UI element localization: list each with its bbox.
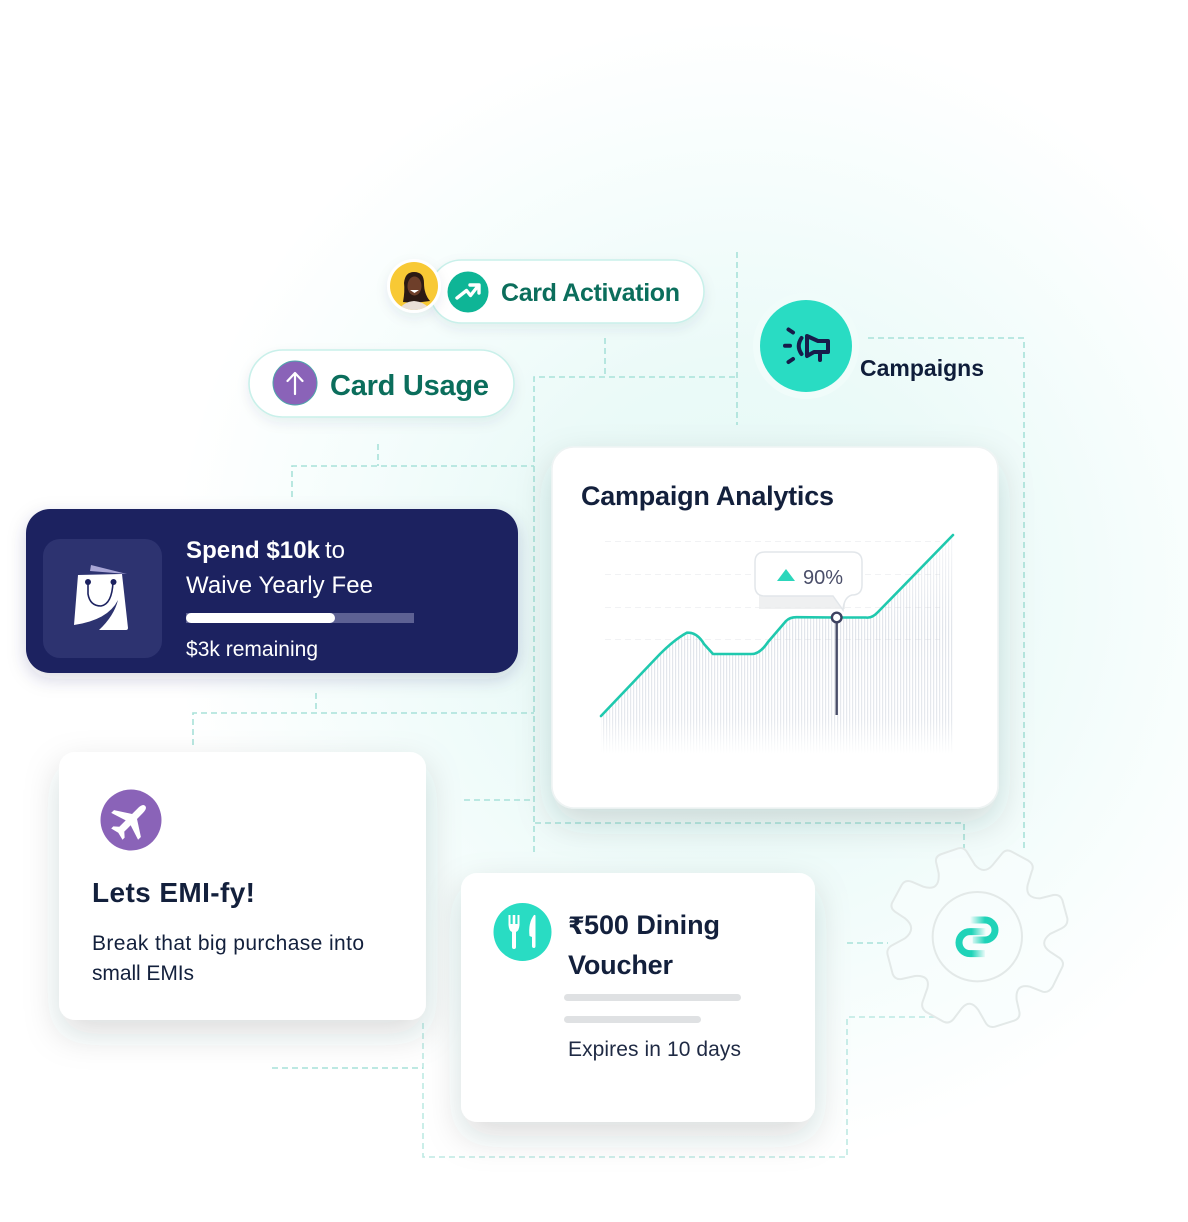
tooltip: 90% [755, 552, 862, 610]
label: Campaigns: Campaigns [860, 355, 984, 381]
text: Waive Yearly Fee: Waive Yearly Fee [186, 572, 373, 599]
progress bar [186, 613, 414, 623]
text: description: Break that big purchase into [92, 932, 364, 955]
heading: Campaign Analytics: Campaign Analytics [581, 481, 834, 511]
panel: Spend card [26, 509, 518, 673]
label: Card Activation: Card Activation [501, 279, 680, 307]
icon: gear with link logo [887, 848, 1067, 1027]
connector lines [193, 252, 1024, 1157]
icon: megaphone [753, 293, 859, 399]
text: description: small EMIs [92, 962, 194, 985]
heading: 500 Dining Voucher [568, 910, 720, 980]
pill: Card Usage [249, 350, 514, 417]
panel: Dining Voucher [461, 873, 815, 1122]
panel: Campaign Analytics [552, 447, 998, 808]
campaigns badge [753, 293, 984, 399]
label: Card Usage: Card Usage [330, 370, 489, 402]
icon: fork and knife [494, 903, 552, 961]
tooltip: 90%: 90% [803, 567, 843, 589]
marker [832, 613, 842, 715]
icon: trend arrow [448, 272, 488, 312]
heading: Lets EMI-fy!: Lets EMI-fy! [92, 877, 255, 908]
heading: 500 Dining Voucher: 500 Dining [584, 910, 720, 940]
text: expiry: Expires in 10 days [568, 1038, 741, 1061]
icon: plane [100, 790, 162, 850]
icon: up arrow [273, 361, 317, 405]
text: description [92, 932, 364, 985]
pill: Card Activation [430, 260, 704, 323]
avatar [387, 259, 441, 313]
text: Spend $10k to: Spend $10k [186, 537, 321, 564]
line chart [601, 535, 953, 754]
icon: shopping bag [43, 539, 162, 658]
line series [601, 535, 953, 716]
heading: 500 Dining Voucher: Voucher [568, 950, 673, 980]
text: $3k remaining: $3k remaining [186, 638, 318, 661]
text: Spend $10k to: to [325, 537, 345, 564]
heading: 500 Dining Voucher: ₹ [568, 913, 585, 940]
panel: Lets EMI-fy [59, 752, 426, 1020]
placeholder lines [564, 994, 741, 1023]
